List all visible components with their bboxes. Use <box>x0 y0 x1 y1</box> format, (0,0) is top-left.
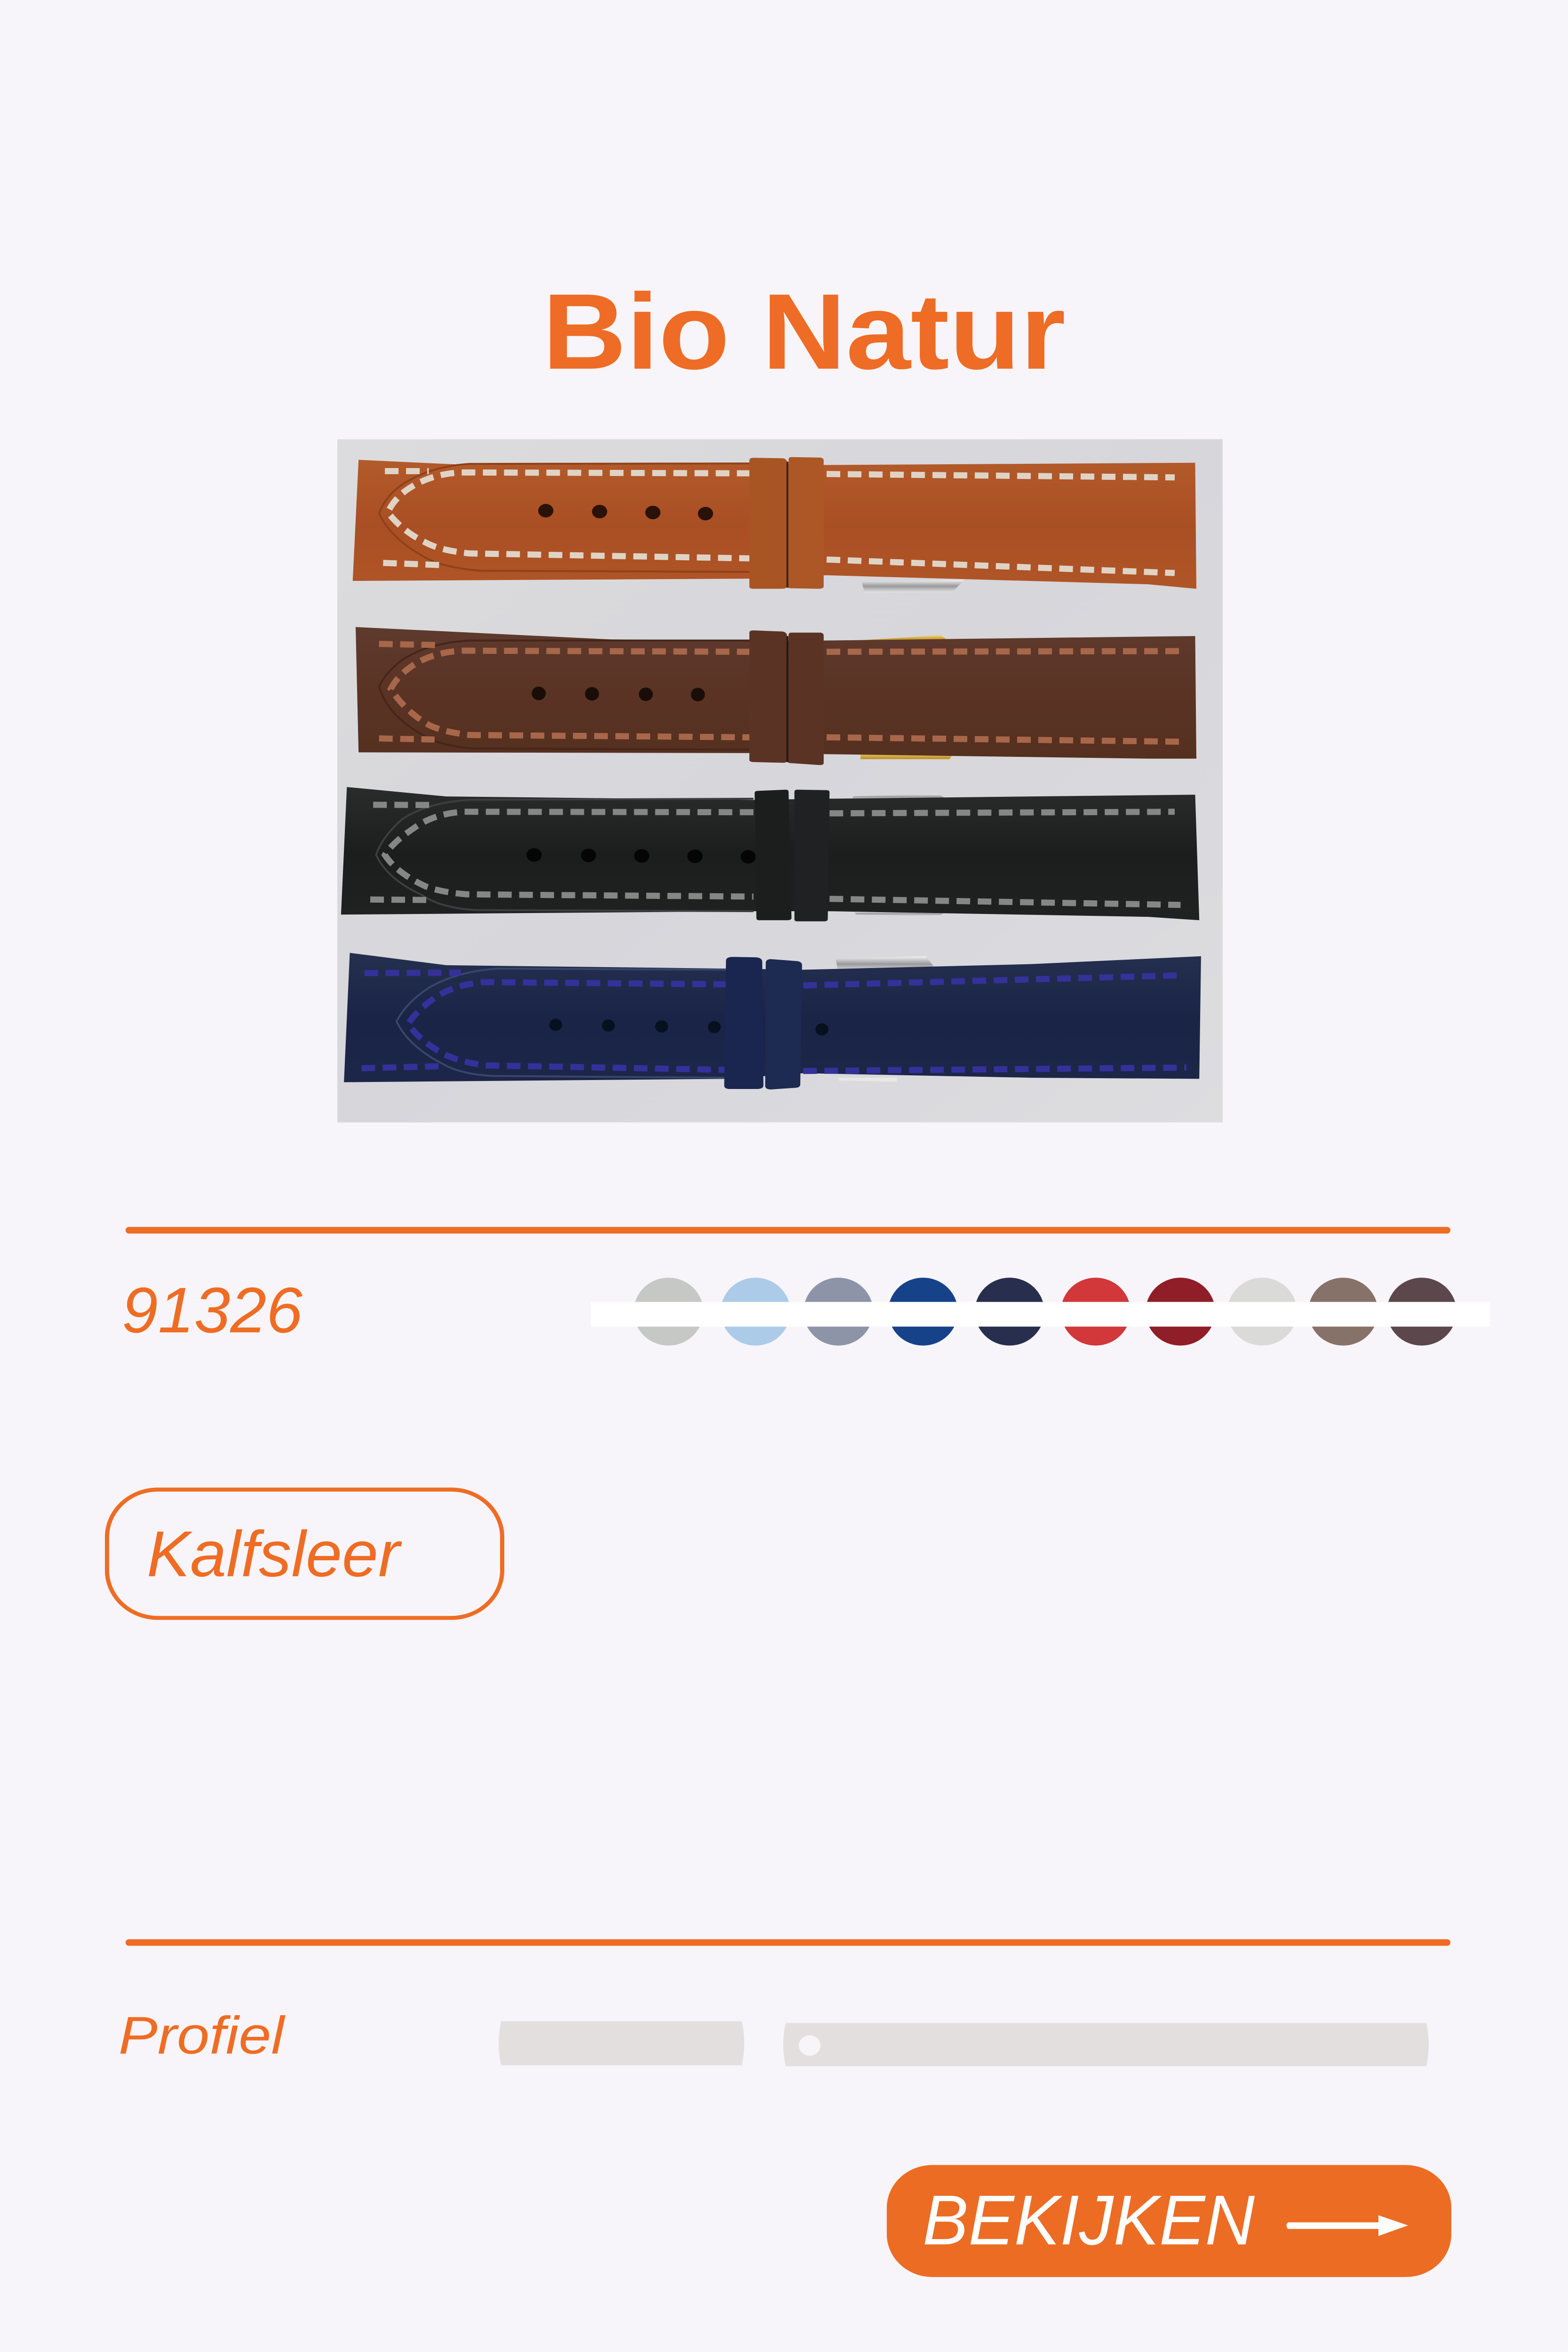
material tag: Kalfsleer: Kalfsleer <box>147 1518 402 1590</box>
divider line bottom <box>126 1939 1450 1946</box>
article number: 91326 <box>122 1274 302 1346</box>
profile label: Profiel <box>119 2006 286 2065</box>
strap: black with grey stitching <box>341 787 1199 922</box>
profile bar: long with dot <box>783 2023 1429 2066</box>
strap: navy with blue stitching <box>344 953 1201 1089</box>
divider line top <box>126 1227 1450 1233</box>
profile bar: short <box>499 2021 744 2066</box>
button: BEKIJKEN <box>887 2165 1451 2277</box>
icon: arrow <box>1286 2215 1408 2236</box>
material tag: Kalfsleer <box>107 1490 502 1618</box>
strap: dark brown with tan stitching <box>356 627 1196 765</box>
strap: cognac with white stitching <box>353 457 1196 593</box>
product photo: four leather watch straps <box>337 439 1223 1122</box>
title: Bio Natur <box>542 272 1066 392</box>
colour swatches <box>591 1278 1490 1345</box>
button: BEKIJKEN: BEKIJKEN <box>923 2181 1255 2259</box>
